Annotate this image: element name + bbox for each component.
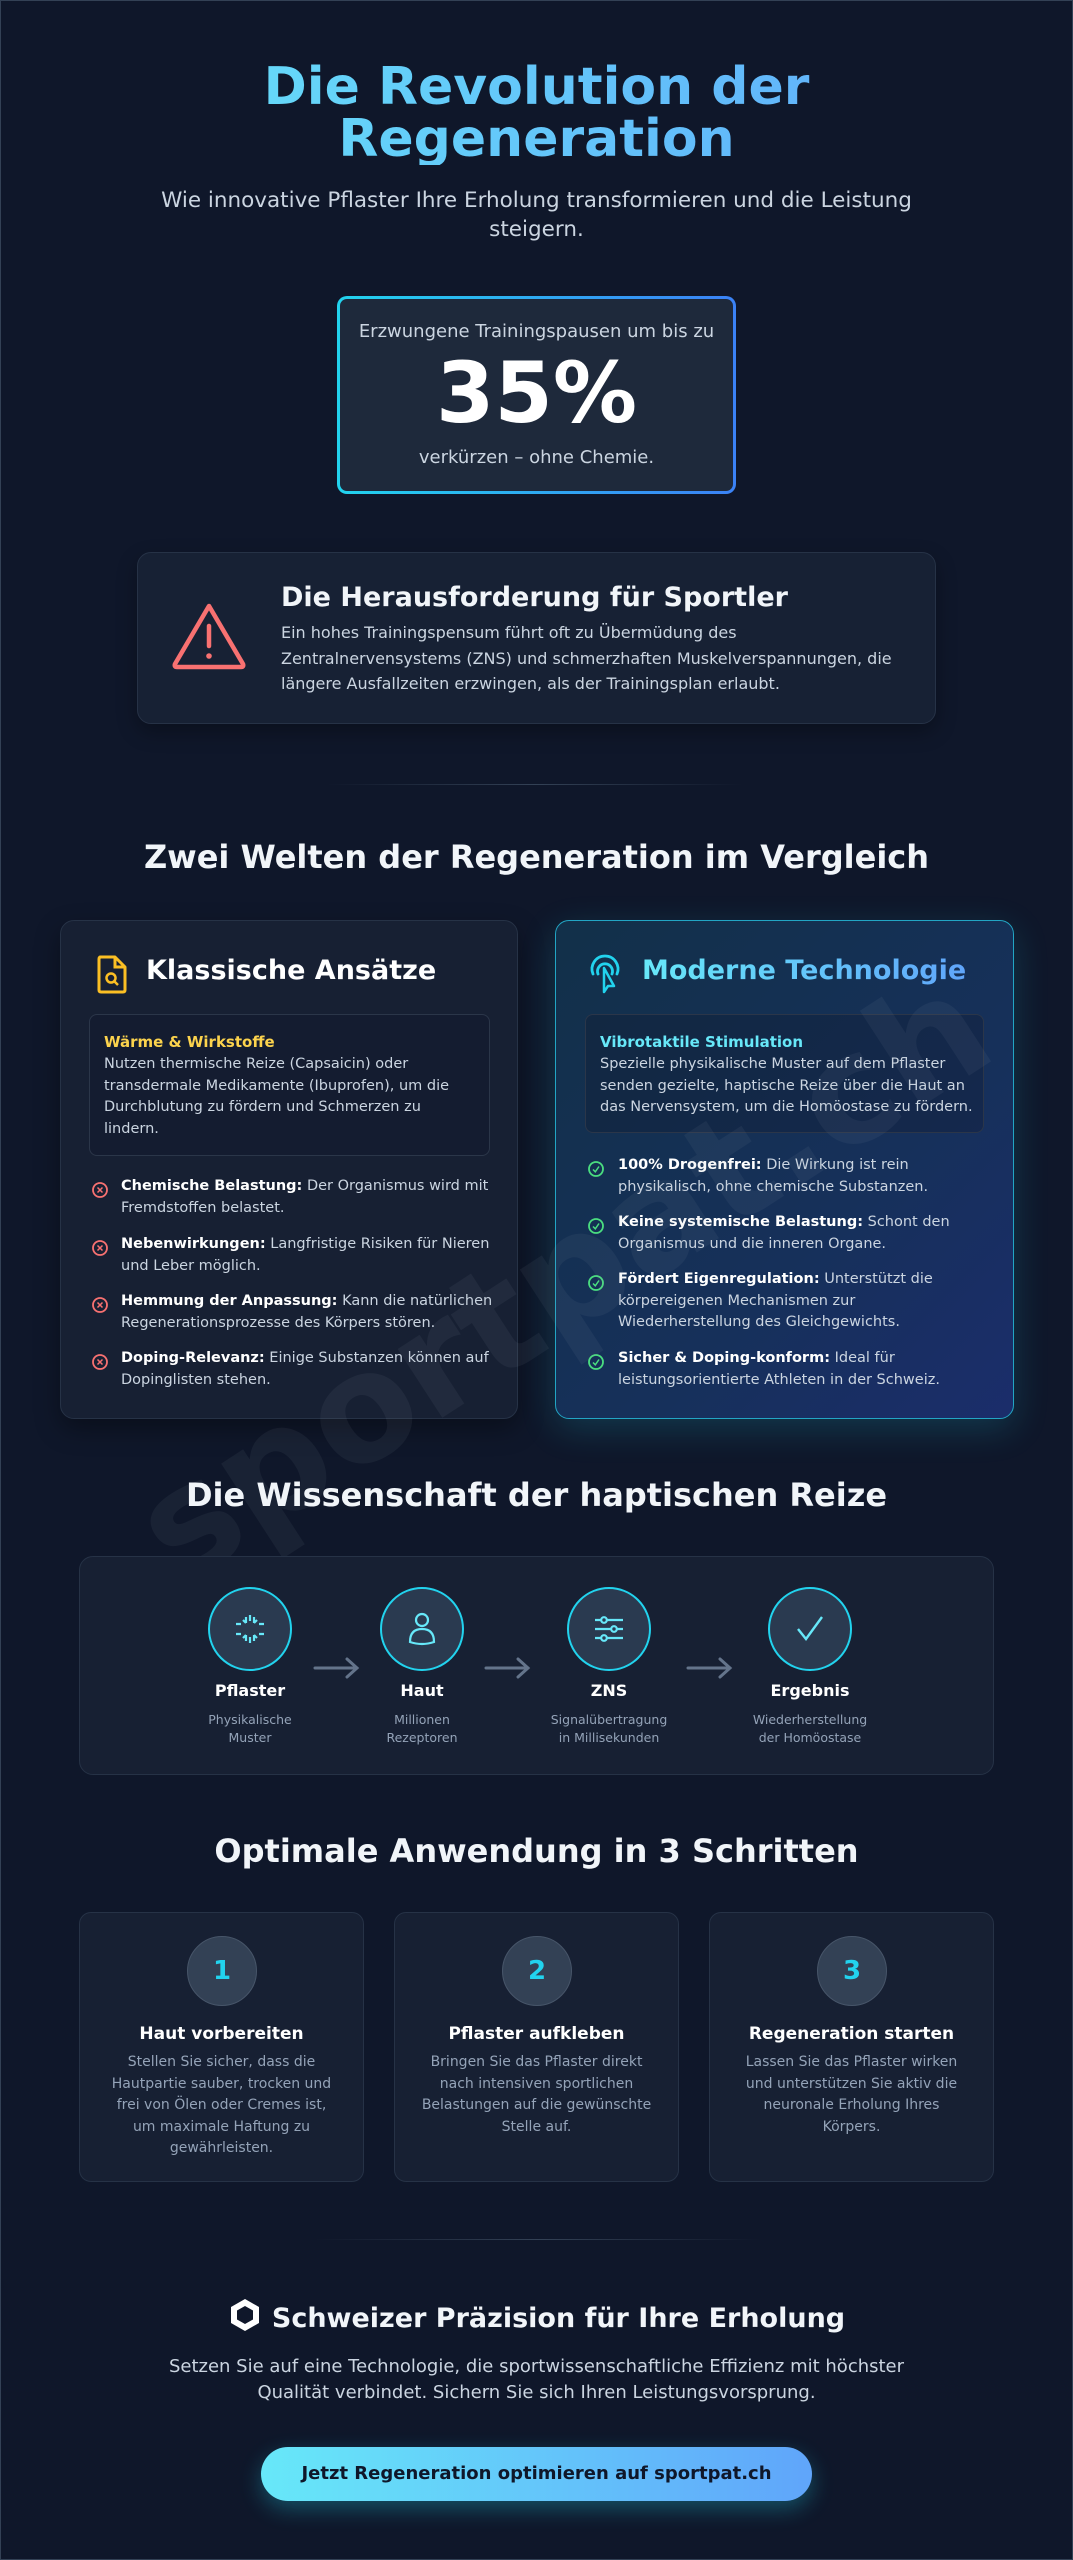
challenge text: längere Ausfallzeiten erzwingen, als der Trainingsplan erlaubt. — [281, 674, 780, 693]
info text: lindern. — [104, 1120, 159, 1136]
step card 2 — [394, 1912, 679, 2182]
step: Ergebnis: Ergebnis — [770, 1681, 849, 1700]
title — [0, 61, 1073, 165]
step: ZNS: ZNS — [591, 1681, 627, 1700]
icon: warning — [172, 604, 246, 670]
list item: doping: Doping-Relevanz: Einige Substanzen können auf — [121, 1350, 489, 1366]
list item: drug free: 100% Drogenfrei: Die Wirkung ist rein — [618, 1157, 909, 1173]
step card 1: frei von Ölen oder Cremes ist, — [117, 2097, 326, 2113]
arrow — [314, 1657, 360, 1679]
list item: doping: Dopinglisten stehen. — [121, 1372, 271, 1388]
challenge heading: Die Herausforderung für Sportler — [281, 582, 788, 613]
info text: das Nervensystem, um die Homöostase zu fördern. — [600, 1099, 973, 1115]
step: Haut — [380, 1587, 464, 1745]
step card 2: Bringen Sie das Pflaster direkt — [431, 2054, 642, 2070]
step card 2: Belastungen auf die gewünschte — [422, 2097, 651, 2113]
step card 3: neuronale Erholung Ihres — [764, 2097, 939, 2113]
list item: doping safe: Sicher & Doping-konform: Ideal für — [618, 1350, 895, 1366]
panel: classic approaches — [60, 920, 518, 1419]
list item: doping safe: leistungsorientierte Athleten in der Schweiz. — [618, 1372, 940, 1388]
step: Pflaster — [208, 1587, 292, 1745]
panel: modern technology — [555, 920, 1014, 1419]
list item: side effects — [92, 1236, 489, 1274]
list item: inhibition: Hemmung der Anpassung: Kann die natürlichen — [121, 1293, 492, 1309]
challenge text: Zentralnervensystems (ZNS) und schmerzhaften Muskelverspannungen, die — [281, 648, 892, 668]
list item: inhibition: Regenerationsprozesse des Körpers stören. — [121, 1314, 435, 1330]
info heading: Vibrotaktile Stimulation — [600, 1033, 803, 1051]
watermark: sportpat.ch — [105, 939, 1021, 1618]
title: Regeneration — [338, 109, 735, 169]
step card 3 — [709, 1912, 994, 2182]
step card 1: gewährleisten. — [170, 2140, 273, 2156]
info text: Durchblutung zu fördern und Schmerzen zu — [104, 1099, 421, 1115]
list item: self regulation: Wiederherstellung des Gleichgewichts. — [618, 1314, 900, 1330]
info text: Spezielle physikalische Muster auf dem Pflaster — [600, 1056, 945, 1072]
list item: self regulation: körpereigenen Mechanismen zur — [618, 1292, 855, 1308]
heading: science: Die Wissenschaft der haptischen Reize — [186, 1476, 887, 1514]
step card 1: Hautpartie sauber, trocken und — [112, 2076, 331, 2092]
footer text: Setzen Sie auf eine Technologie, die sportwissenschaftliche Effizienz mit höchster — [169, 2356, 904, 2377]
list item: side effects: und Leber möglich. — [121, 1258, 261, 1274]
step card 1: 1 — [213, 1956, 231, 1986]
icon: touch — [590, 954, 620, 994]
arrow — [686, 1657, 732, 1679]
stat label top: Erzwungene Trainingspausen um bis zu — [359, 321, 714, 342]
step card 2: Pflaster aufkleben — [448, 2024, 625, 2044]
stat label bottom: verkürzen – ohne Chemie. — [419, 447, 654, 468]
list item: chemical load — [92, 1178, 488, 1216]
subtitle: steigern. — [489, 217, 584, 242]
info box — [585, 1014, 984, 1133]
step card 3: Körpers. — [823, 2118, 880, 2134]
stat number: 35% — [436, 344, 637, 442]
list item: side effects: Nebenwirkungen: Langfristige Risiken für Nieren — [121, 1236, 489, 1252]
step: Ergebnis: Wiederherstellung — [753, 1712, 867, 1727]
step: Haut: Haut — [400, 1681, 444, 1700]
card title: Klassische Ansätze — [146, 955, 436, 986]
list item: chemical load: Fremdstoffen belastet. — [121, 1200, 284, 1216]
list item: self regulation — [588, 1271, 933, 1330]
step card 3: Lassen Sie das Pflaster wirken — [746, 2054, 957, 2070]
title: Die Revolution der — [264, 57, 809, 117]
CTA button: Jetzt Regeneration optimieren auf sportpat.ch — [301, 2463, 772, 2484]
step card 2: Stelle auf. — [502, 2118, 571, 2134]
list item: chemical load: Chemische Belastung: Der Organismus wird mit — [121, 1178, 488, 1194]
heading: comparison: Zwei Welten der Regeneration im Vergleich — [144, 838, 929, 876]
card title: Moderne Technologie — [642, 955, 966, 986]
step card 3: Regeneration starten — [749, 2024, 954, 2044]
step card 1: Haut vorbereiten — [139, 2024, 304, 2044]
list item: inhibition — [92, 1293, 492, 1330]
list item: no systemic load: Organismus und die inneren Organe. — [618, 1236, 886, 1252]
list item: self regulation: Fördert Eigenregulation: Unterstützt die — [618, 1271, 933, 1287]
step card 1: Stellen Sie sicher, dass die — [128, 2054, 315, 2070]
step: ZNS: in Millisekunden — [559, 1730, 659, 1745]
step card 1: um maximale Haftung zu — [133, 2118, 310, 2134]
list item: doping — [92, 1350, 489, 1388]
info text — [104, 1056, 449, 1136]
list item: no systemic load — [588, 1214, 950, 1252]
footer heading: Schweizer Präzision für Ihre Erholung — [272, 2303, 845, 2334]
step: Haut: Millionen — [394, 1712, 450, 1727]
info text: senden gezielte, haptische Reize über die Haut an — [600, 1078, 965, 1094]
heading: steps: Optimale Anwendung in 3 Schritten — [214, 1832, 859, 1870]
list item: doping safe — [588, 1350, 940, 1388]
step: ZNS — [551, 1587, 667, 1745]
step card 2: nach intensiven sportlichen — [440, 2076, 633, 2092]
info text: transdermale Medikamente (Ibuprofen), um die — [104, 1078, 449, 1094]
step: Ergebnis: der Homöostase — [759, 1730, 861, 1745]
footer text: Qualität verbindet. Sichern Sie sich Ihren Leistungsvorsprung. — [257, 2382, 816, 2403]
challenge text: Ein hohes Trainingspensum führt oft zu Übermüdung des — [281, 623, 737, 642]
step: Haut: Rezeptoren — [386, 1730, 458, 1745]
list item: drug free — [588, 1157, 928, 1194]
subtitle — [161, 188, 912, 242]
challenge text — [281, 623, 892, 693]
arrow — [484, 1657, 530, 1679]
step card 3: 3 — [843, 1956, 861, 1986]
step: Pflaster: Muster — [229, 1730, 271, 1745]
step: Ergebnis — [753, 1587, 867, 1745]
subtitle: Wie innovative Pflaster Ihre Erholung transformieren und die Leistung — [161, 188, 912, 213]
step card 1 — [79, 1912, 364, 2182]
step card 2: 2 — [528, 1956, 546, 1986]
panel: challenge — [137, 552, 936, 724]
icon: file search — [98, 956, 126, 994]
info text: Nutzen thermische Reize (Capsaicin) oder — [104, 1056, 408, 1072]
info heading: Wärme & Wirkstoffe — [104, 1033, 275, 1051]
step: Pflaster: Pflaster — [215, 1681, 285, 1700]
CTA button — [261, 2447, 812, 2501]
info box — [89, 1014, 490, 1156]
step: ZNS: Signalübertragung — [551, 1712, 667, 1727]
step card 3: und unterstützen Sie aktiv die — [746, 2076, 957, 2092]
step: Pflaster: Physikalische — [208, 1712, 292, 1727]
list item: no systemic load: Keine systemische Belastung: Schont den — [618, 1214, 950, 1230]
panel: process flow — [79, 1556, 994, 1775]
footer text — [169, 2356, 904, 2403]
stat box — [337, 296, 736, 494]
list item: drug free: physikalisch, ohne chemische Substanzen. — [618, 1178, 928, 1194]
info text — [600, 1056, 973, 1115]
